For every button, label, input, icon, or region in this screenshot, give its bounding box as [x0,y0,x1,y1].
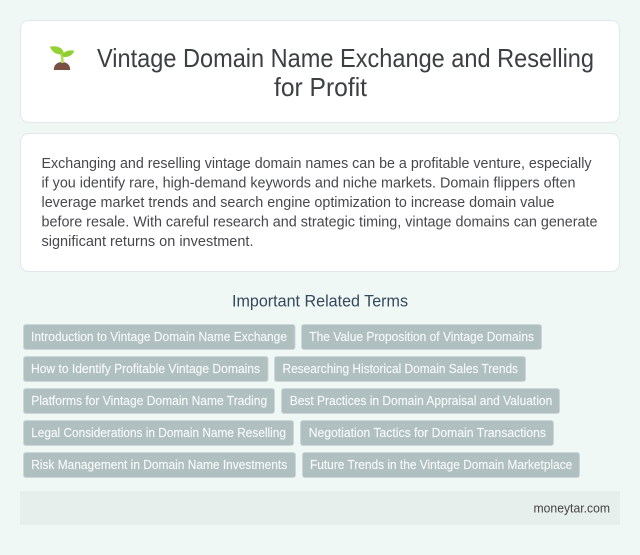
tag: value proposition: The Value Proposition of Vintage Domains [309,330,534,344]
tag: researching sales: Researching Historical Domain Sales Trends [282,362,518,376]
text block: description: if you identify rare, high-demand keywords and niche markets. Domain flippers often [42,176,576,192]
footer bar [20,491,620,525]
tag: platforms [24,388,274,414]
panel: description card [20,134,620,272]
tag: risk [24,452,296,478]
footer: source: moneytar.com [534,501,610,515]
tag: future trends [302,452,580,478]
text block: description: significant returns on investment. [42,234,254,250]
title [97,43,594,102]
tag: future trends: Future Trends in the Vintage Domain Marketplace [310,458,572,472]
text block: description: before resale. With careful research and strategic timing, vintage domains can generate [42,214,598,230]
tag: legal: Legal Considerations in Domain Name Reselling [31,426,286,440]
tag: best practices [282,388,560,414]
tag: platforms: Platforms for Vintage Domain Name Trading [31,394,267,408]
tag: identify profitable: How to Identify Profitable Vintage Domains [31,362,260,376]
text block: description: leverage market trends and search engine optimization to increase domain value [42,195,554,211]
text block: description [42,156,598,250]
heading: related terms: Important Related Terms [232,292,408,310]
tag: value proposition [302,324,542,350]
tag: negotiation [300,420,554,446]
tag: researching sales [274,356,526,382]
tag: negotiation: Negotiation Tactics for Domain Transactions [309,426,546,440]
tag: identify profitable [24,356,268,382]
tag: best practices: Best Practices in Domain Appraisal and Valuation [290,394,552,408]
title: Vintage Domain Name Exchange and Reselling [97,43,594,73]
tag: risk: Risk Management in Domain Name Investments [31,458,287,472]
tag: legal [24,420,294,446]
tag: introduction: Introduction to Vintage Domain Name Exchange [31,330,287,344]
tag: introduction [24,324,295,350]
icon: sprout [50,46,74,70]
panel: header card [20,20,620,122]
text block: description: Exchanging and reselling vintage domain names can be a profitable venture, especially [42,156,592,172]
title: for Profit [274,72,368,102]
tag list [24,324,580,478]
